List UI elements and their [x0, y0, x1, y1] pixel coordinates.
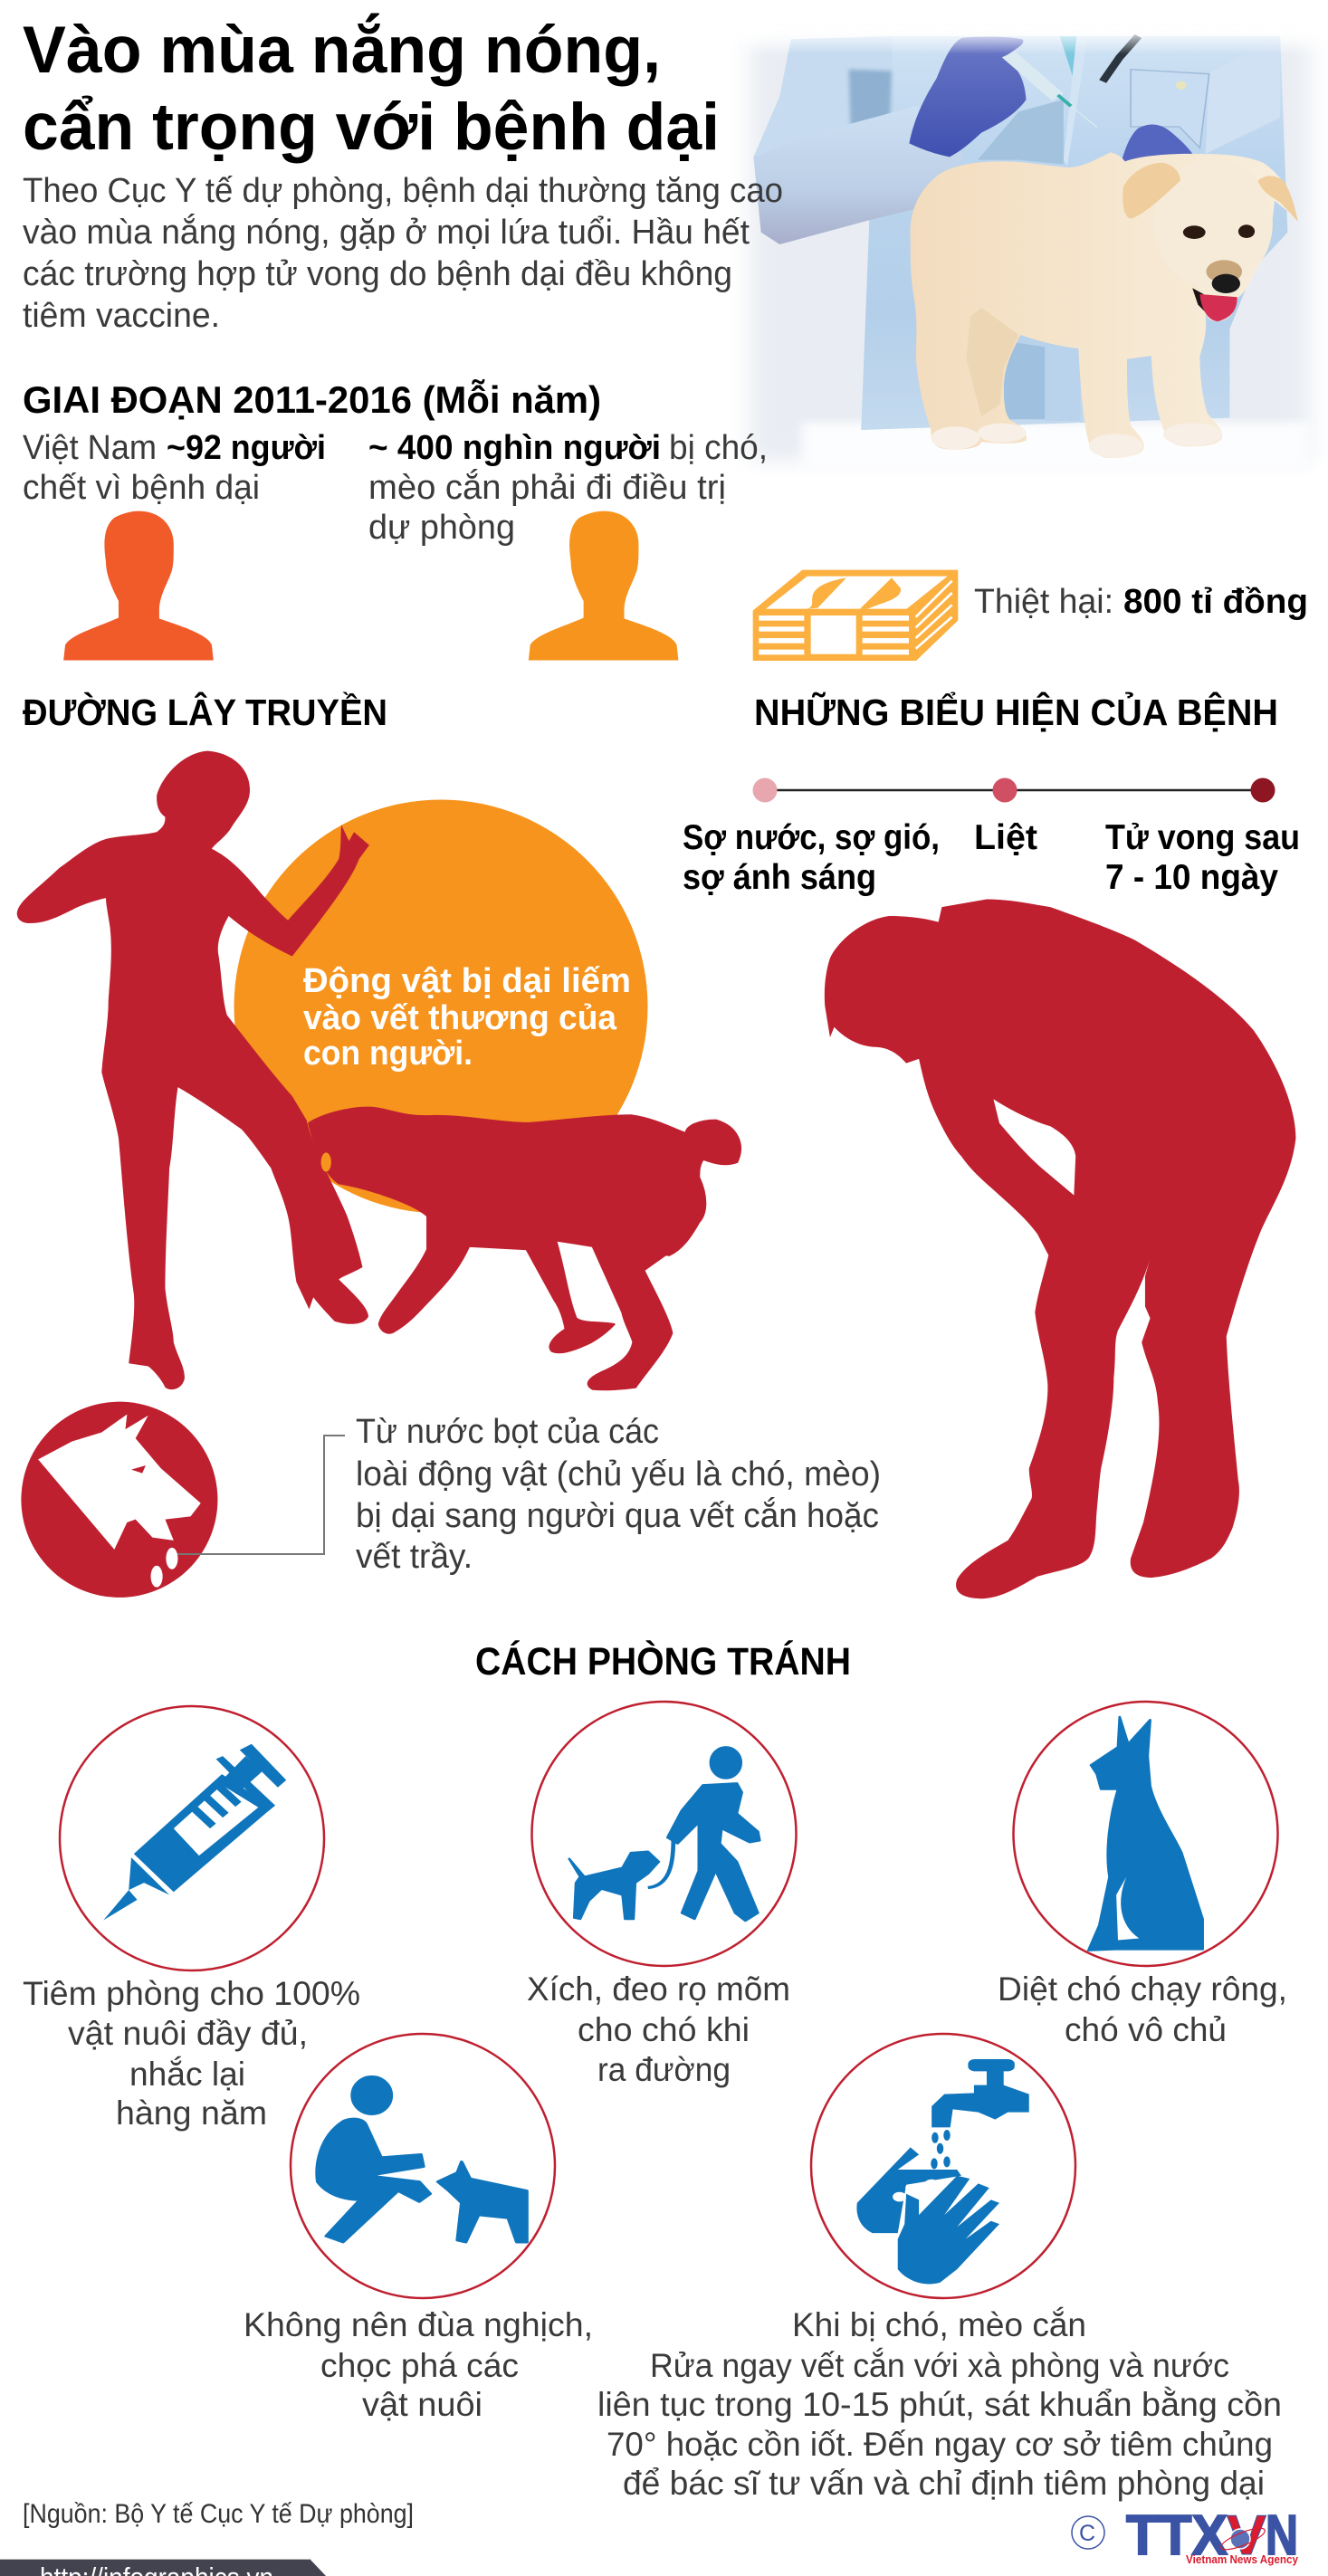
stat: damage	[974, 583, 1308, 621]
heading: period 2011-2016: GIAI ĐOẠN 2011-2016 (Mỗi năm)	[23, 377, 601, 421]
stat: 400 thousand treated: mèo cắn phải đi điều trị	[368, 468, 726, 507]
caption: leash and muzzle	[527, 1970, 790, 2088]
stat: 92 deaths: ~92 người	[167, 429, 326, 467]
source: [Nguồn: Bộ Y tế Cục Y tế Dự phòng]	[23, 2499, 414, 2529]
forearm sleeve	[753, 106, 964, 244]
icon: person crouching by dog	[317, 2076, 527, 2242]
text: saliva transmission: bị dại sang người qua vết cắn hoặc	[356, 1496, 879, 1535]
logo: TTXVN: N	[1266, 2504, 1298, 2567]
caption: vaccinate pets: vật nuôi đầy đủ,	[68, 2015, 308, 2052]
icon: rabid dog head	[21, 1402, 217, 1598]
symptom labels: Tử vong sau	[1105, 818, 1300, 857]
caption: when bitten	[597, 2306, 1282, 2502]
text: saliva transmission: loài động vật (chủ yếu là chó, mèo)	[356, 1455, 881, 1493]
intro text: vào mùa nắng nóng, gặp ở mọi lứa tuổi. Hầu hết	[23, 213, 750, 252]
logo: TTXVN: V	[1227, 2504, 1266, 2567]
syringe	[1002, 52, 1064, 101]
caption: stray dogs	[998, 1970, 1287, 2048]
callout in circle: con người.	[303, 1035, 473, 1073]
text: saliva transmission	[356, 1413, 881, 1576]
silhouette: dog	[309, 1108, 740, 1389]
caption: do not tease pets: chọc phá các	[320, 2347, 519, 2384]
icon: person orange	[529, 511, 678, 660]
symptom labels: Sợ nước, sợ gió,	[683, 818, 940, 857]
caption: vaccinate pets: hàng năm	[116, 2094, 267, 2132]
caption: when bitten: 70° hoặc cồn iốt. Đến ngay cơ sở tiêm chủng	[607, 2426, 1273, 2463]
caption: do not tease pets	[244, 2306, 593, 2423]
callout in circle: vào vết thương của	[303, 999, 617, 1037]
icon: sitting dog	[1088, 1717, 1203, 1951]
caption: when bitten: liên tục trong 10-15 phút, sát khuẩn bằng cồn	[597, 2386, 1282, 2423]
caption: leash and muzzle: cho chó khi	[578, 2011, 750, 2048]
icon: stack of money	[754, 571, 957, 660]
caption: stray dogs: chó vô chủ	[1065, 2011, 1227, 2048]
logo: TTXVN	[1126, 2504, 1299, 2567]
photo: vet vaccinating a puppy	[742, 27, 1325, 471]
icon: person walking leashed dog	[569, 1747, 760, 1921]
caption: stray dogs: Diệt chó chạy rông,	[998, 1970, 1287, 2008]
pocket	[1131, 70, 1209, 148]
puppy	[910, 152, 1298, 458]
copyright mark: C	[1079, 2521, 1095, 2546]
stat: damage: Thiệt hại:	[974, 583, 1113, 621]
logo: TTXVN: TTX	[1126, 2504, 1228, 2567]
caption: when bitten: để bác sĩ tư vấn và chỉ định tiêm phòng dại	[623, 2465, 1265, 2502]
caption: vaccinate pets: Tiêm phòng cho 100%	[23, 1975, 360, 2012]
icon: syringe	[103, 1744, 286, 1921]
prevention circles	[60, 1702, 1278, 2298]
small glove	[1120, 125, 1193, 176]
heading: transmission: ĐƯỜNG LÂY TRUYỀN	[23, 692, 387, 733]
intro text: Theo Cục Y tế dự phòng, bệnh dại thường tăng cao	[23, 172, 783, 210]
logo: TTXVN: Vietnam News Agency	[1186, 2552, 1299, 2566]
caption: leash and muzzle: Xích, đeo rọ mõm	[527, 1970, 790, 2008]
symptom labels: 7 - 10 ngày	[1105, 858, 1278, 897]
caption: vaccinate pets	[23, 1975, 360, 2132]
stat: 400 thousand treated: bị chó,	[669, 429, 768, 467]
stat: 92 deaths: Việt Nam	[23, 429, 157, 467]
icon: person orange-red	[63, 511, 214, 660]
caption: leash and muzzle: ra đường	[597, 2051, 731, 2088]
stethoscope	[1103, 36, 1138, 81]
title: Vào mùa nắng nóng,	[23, 14, 661, 87]
heading: prevention: CÁCH PHÒNG TRÁNH	[475, 1639, 851, 1684]
symptom labels	[683, 818, 1300, 897]
fade at photo top	[742, 27, 1325, 54]
title: cẩn trọng với bệnh dại	[23, 91, 720, 164]
large glove	[909, 37, 1027, 157]
stat: 92 deaths: chết vì bệnh dại	[23, 469, 260, 507]
heading: symptoms: NHỮNG BIỂU HIỆN CỦA BỆNH	[754, 691, 1278, 733]
stat: 400 thousand treated: dự phòng	[368, 509, 515, 547]
coat body	[861, 36, 1287, 430]
text: saliva transmission: Từ nước bọt của các	[356, 1413, 659, 1451]
caption: when bitten: Khi bị chó, mèo cắn	[792, 2306, 1086, 2343]
icon: washing hands	[856, 2059, 1029, 2284]
tie	[1060, 36, 1082, 83]
caption: do not tease pets: vật nuôi	[362, 2386, 482, 2423]
timeline of symptoms	[753, 778, 1275, 802]
caption: when bitten: Rửa ngay vết cắn với xà phòng và nước	[650, 2347, 1229, 2384]
stat: damage: 800 tỉ đồng	[1123, 583, 1308, 621]
coat upper arm	[753, 36, 892, 157]
connector line	[177, 1436, 345, 1554]
callout in circle: Động vật bị dại liếm	[303, 962, 631, 1000]
stat: 400 thousand treated	[368, 429, 768, 547]
footer bar	[0, 2559, 326, 2576]
symptom labels: sợ ánh sáng	[683, 858, 876, 897]
intro text: tiêm vaccine.	[23, 297, 220, 335]
silhouette: sick man	[825, 899, 1295, 1598]
copyright mark	[1072, 2516, 1104, 2549]
silhouette: woman	[17, 751, 369, 1389]
stat: 400 thousand treated: ~ 400 nghìn người	[368, 429, 661, 467]
callout in circle	[303, 962, 631, 1073]
intro text: các trường hợp tử vong do bệnh dại đều không	[23, 255, 732, 293]
title	[23, 14, 720, 164]
orange circle	[234, 800, 648, 1213]
intro text	[23, 172, 783, 335]
stat: 92 deaths	[23, 429, 326, 507]
symptom labels: Liệt	[974, 818, 1037, 857]
caption: vaccinate pets: nhắc lại	[129, 2056, 245, 2093]
text: saliva transmission: vết trầy.	[356, 1538, 473, 1576]
caption: do not tease pets: Không nên đùa nghịch,	[244, 2306, 593, 2343]
